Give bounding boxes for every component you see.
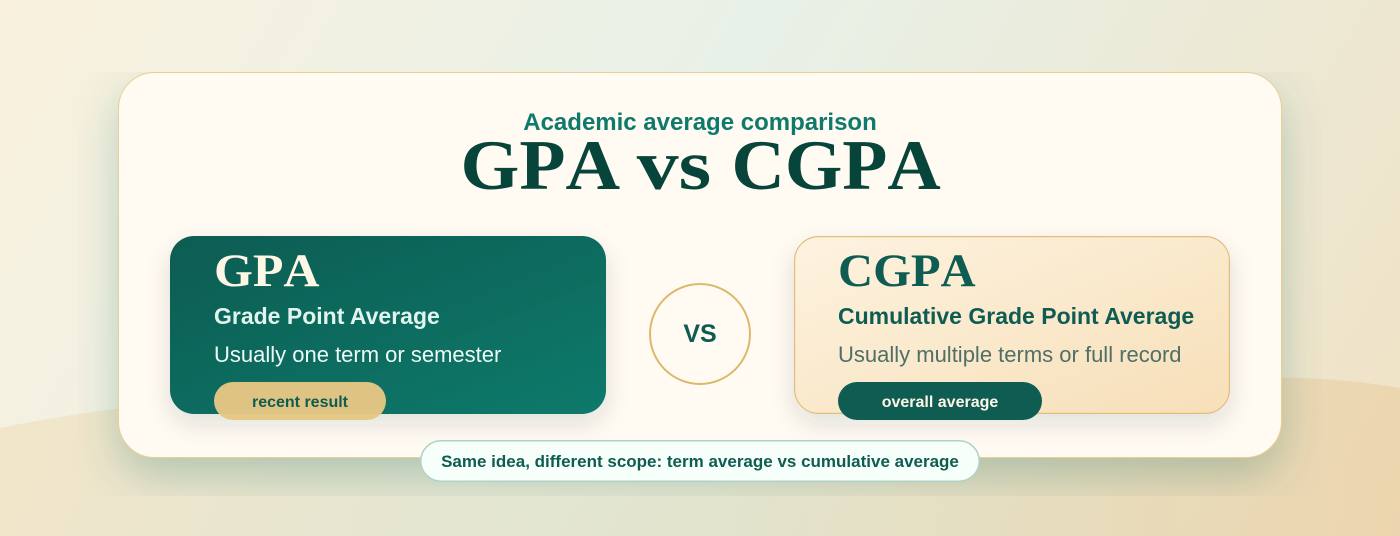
CGPA tag: overall average <box>882 394 998 411</box>
vs badge <box>650 284 750 384</box>
GPA description: Usually one term or semester <box>214 342 501 367</box>
title <box>460 126 941 205</box>
title: vs <box>637 126 711 205</box>
panel: CGPA <box>795 237 1229 420</box>
panel: GPA <box>170 236 606 420</box>
background hill <box>0 378 1400 536</box>
CGPA heading: CGPA <box>838 246 976 297</box>
GPA heading: GPA <box>214 246 320 297</box>
GPA tag <box>214 382 386 420</box>
takeaway callout <box>421 441 979 481</box>
main card <box>118 72 1282 481</box>
CGPA full name: Cumulative Grade Point Average <box>838 303 1194 329</box>
CGPA description: Usually multiple terms or full record <box>838 342 1182 367</box>
takeaway callout: Same idea, different scope: term average vs cumulative average <box>441 452 959 471</box>
GPA tag: recent result <box>252 394 349 411</box>
vs badge: VS <box>683 320 717 348</box>
title: GPA <box>460 126 620 204</box>
GPA full name: Grade Point Average <box>214 303 440 329</box>
eyebrow heading: Academic average comparison <box>523 109 877 136</box>
CGPA tag <box>838 382 1042 420</box>
title: CGPA <box>732 126 941 205</box>
